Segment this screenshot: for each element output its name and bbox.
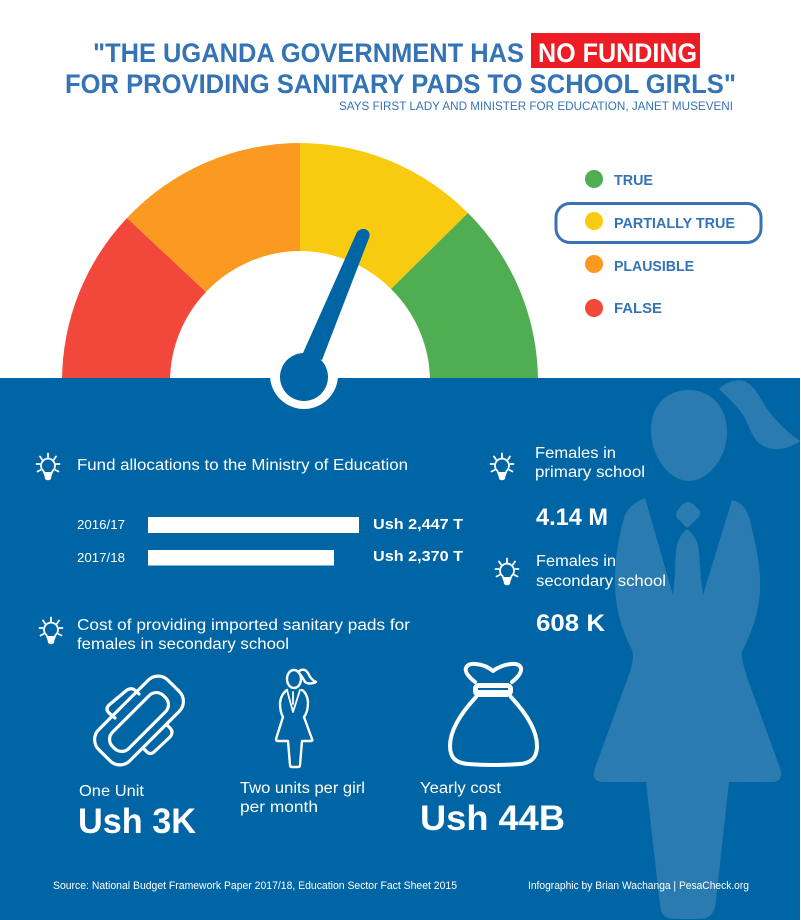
icon: sanitary pad [89, 670, 189, 771]
legend [556, 170, 761, 317]
stat: two units: per month [240, 799, 318, 816]
bar chart: Ush 2,447 T [373, 516, 463, 533]
stat: one unit: Ush 3K [78, 802, 196, 841]
stat: females in secondary school: Females in [536, 553, 616, 570]
legend item: true: TRUE [614, 173, 653, 189]
stat: females in primary school: primary school [535, 464, 645, 481]
stat: females in secondary school: 608 K [536, 610, 606, 637]
section: fund allocations: Fund allocations to the Ministry of Education [77, 457, 408, 474]
legend item: true [585, 170, 653, 189]
stat: two units [240, 780, 365, 816]
stat: one unit [78, 783, 196, 841]
stat: two units: Two units per girl [240, 780, 365, 797]
highlighted phrase: no funding: NO FUNDING [538, 38, 697, 68]
attribution: SAYS FIRST LADY AND MINISTER FOR EDUCATION, JANET MUSEVENI [339, 101, 733, 113]
silhouette of schoolgirl [594, 380, 800, 919]
section heading: cost of pads: Cost of providing imported sanitary pads for [77, 617, 410, 634]
title: FOR PROVIDING SANITARY PADS TO SCHOOL GIRLS" [65, 69, 736, 99]
legend item: plausible: PLAUSIBLE [614, 259, 694, 275]
stat: females in primary school: 4.14 M [536, 504, 608, 531]
section heading: cost of pads [40, 617, 410, 653]
section heading: cost of pads: females in secondary school [77, 636, 289, 653]
bar chart: 2016/17 [77, 517, 125, 532]
icon: money bag [450, 664, 537, 765]
gauge hub and needle [270, 229, 370, 409]
stat: females in primary school [490, 445, 645, 531]
bar chart [77, 516, 463, 566]
bar chart: Ush 2,370 T [373, 548, 463, 565]
stat: yearly cost: Ush 44B [420, 799, 565, 838]
stat: yearly cost: Yearly cost [420, 780, 502, 797]
bar chart: 2017/18 [77, 550, 125, 565]
icon: lightbulb [496, 558, 518, 585]
blue panel [0, 378, 800, 920]
gauge dial [62, 143, 538, 381]
stat: females in secondary school [496, 553, 666, 637]
source note: Source: National Budget Framework Paper 2017/18, Education Sector Fact Sheet 2015 [53, 880, 457, 892]
title [65, 33, 736, 99]
icon: lightbulb [40, 618, 62, 644]
icon: lightbulb [490, 454, 514, 480]
legend item: partially true [585, 212, 735, 232]
stat: one unit: One Unit [79, 783, 145, 800]
legend item: false: FALSE [614, 301, 662, 317]
legend item: plausible [585, 255, 694, 275]
stat: yearly cost [420, 780, 565, 838]
title: "THE UGANDA GOVERNMENT HAS [93, 38, 524, 68]
credit: Infographic by Brian Wachanga | PesaCheck.org [528, 880, 749, 892]
icon: schoolgirl outline [276, 670, 316, 767]
legend item: false [585, 299, 662, 317]
legend item: partially true: PARTIALLY TRUE [614, 216, 735, 232]
stat: females in secondary school: secondary school [536, 573, 666, 590]
icon: lightbulb [36, 454, 60, 480]
legend selection outline [556, 204, 761, 242]
section: fund allocations [36, 454, 463, 566]
stat: females in primary school: Females in [535, 445, 616, 462]
